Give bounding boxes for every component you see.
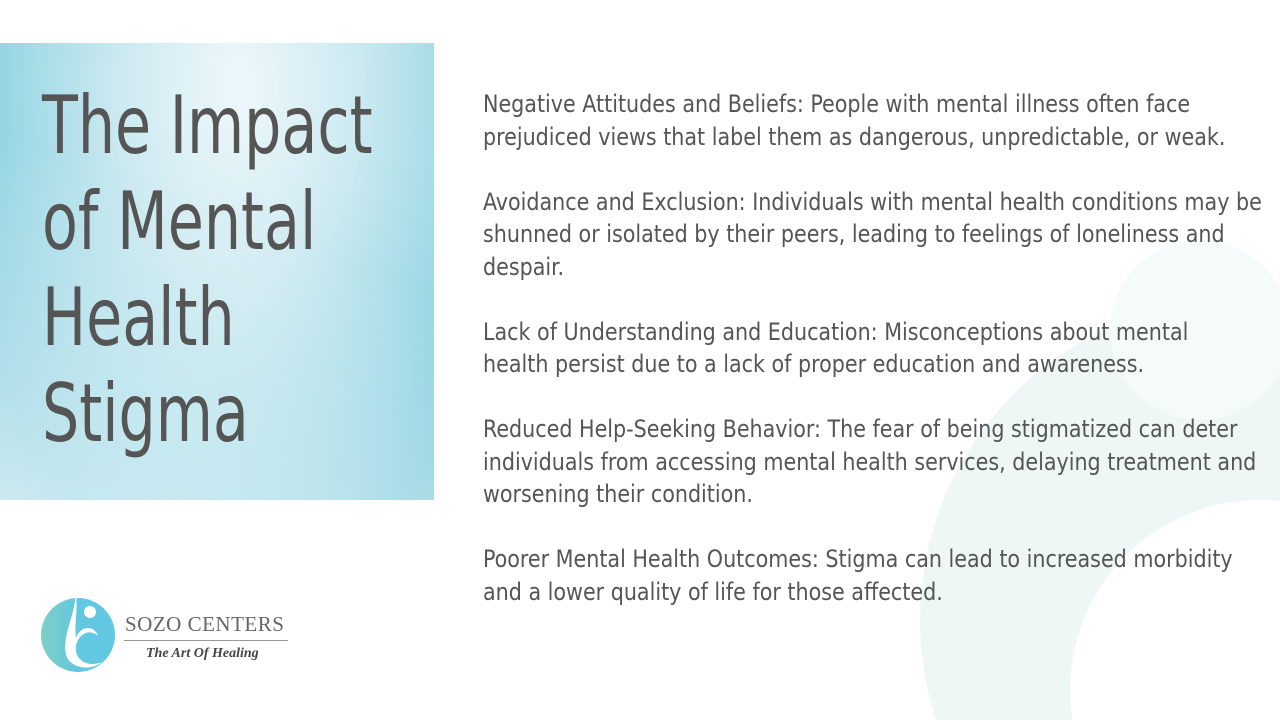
item: negative attitudes (483, 90, 1225, 150)
item: reduced help-seeking: Reduced Help-Seeking Behavior: The fear of being stigmatized can deter (483, 415, 1237, 443)
logo: The Art Of Healing (146, 646, 259, 661)
item: poorer outcomes (483, 545, 1233, 606)
item: poorer outcomes: and a lower quality of life for those affected. (483, 578, 943, 606)
title: of Mental (42, 175, 316, 268)
icon: logo circle (41, 598, 115, 672)
item: avoidance (483, 188, 1262, 280)
text block: impacts (483, 90, 1262, 606)
panel: title background (0, 43, 434, 500)
logo text: SOZO CENTERS (125, 612, 284, 636)
item: negative attitudes: prejudiced views that label them as dangerous, unpredictable, or weak. (483, 122, 1225, 150)
item: lack of understanding: health persist due to a lack of proper education and awareness. (483, 350, 1144, 378)
watermark background (920, 240, 1280, 720)
item: avoidance: despair. (483, 252, 564, 280)
item: reduced help-seeking (483, 415, 1256, 508)
logo (41, 598, 288, 672)
title: Health (42, 271, 235, 364)
title: The Impact (42, 79, 373, 172)
item: lack of understanding (483, 318, 1188, 378)
item: negative attitudes: Negative Attitudes and Beliefs: People with mental illness often face (483, 90, 1190, 118)
item: reduced help-seeking: worsening their condition. (483, 480, 753, 508)
item: reduced help-seeking: individuals from accessing mental health services, delaying treatment and (483, 448, 1256, 476)
item: lack of understanding: Lack of Understanding and Education: Misconceptions about mental (483, 318, 1188, 346)
item: avoidance: shunned or isolated by their peers, leading to feelings of loneliness and (483, 220, 1225, 248)
title (42, 79, 373, 460)
item: poorer outcomes: Poorer Mental Health Outcomes: Stigma can lead to increased morbidity (483, 545, 1233, 573)
item: avoidance: Avoidance and Exclusion: Individuals with mental health conditions may be (483, 188, 1262, 216)
title: Stigma (42, 367, 249, 460)
